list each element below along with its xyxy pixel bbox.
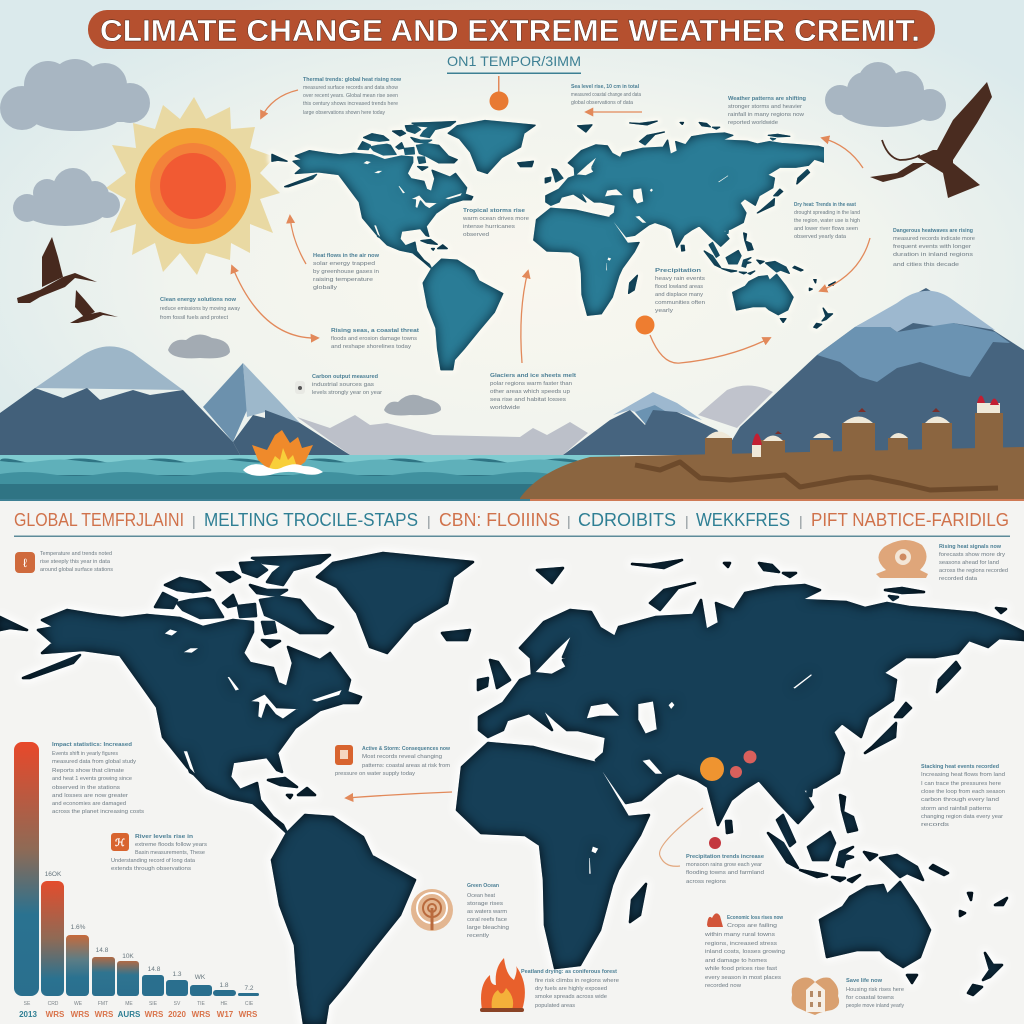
upper note: lower mid: Carbon output measured [312,374,378,380]
bar chart: WRS [145,1010,164,1019]
bar chart: SIE [149,1001,158,1007]
world map: upper [272,121,845,370]
icon: wildfire [480,958,525,1012]
upper note: lower mid: levels strongly year on year [312,390,382,396]
heading row: CDROIBITS [578,509,676,530]
bar chart: 2013 [19,1010,37,1019]
upper note: lower centre: Glaciers and ice sheets melt [490,373,576,379]
note: south indian: within many rural towns [704,932,775,938]
upper note: asia: and lower river flows seen [794,226,858,232]
bar chart: W17 [217,1010,234,1019]
note: bar chart main: and heat 1 events growing since [52,776,132,782]
icon: small fire badge [707,913,723,927]
note: chart secondary: extreme floods follow years [135,842,207,848]
note: south atlantic: Ocean heat [467,893,496,899]
note: top-left: around global surface stations [40,567,113,573]
heading row: | [799,513,803,529]
upper note: asia: Dry heat: Trends in the east [794,202,856,208]
bar chart [14,742,259,1019]
bar chart: CIE [245,1001,254,1007]
icon: radiating badge [411,889,453,931]
icon: large bird [870,82,992,198]
icon: small cloud [168,334,230,358]
upper note: far right: Dangerous heatwaves are rising [893,228,973,234]
heading row: GLOBAL TEMFRJLAINI [14,509,184,530]
note: south atlantic: storage rises [467,901,503,907]
icon: top-left badge [15,552,35,573]
bar chart: WRS [95,1010,114,1019]
upper note: far right: duration in inland regions [893,252,973,258]
upper note: right: Weather patterns are shifting [728,96,806,102]
bar chart: 2020 [168,1010,186,1019]
icon: bird left [17,237,97,303]
icon: village buildings [705,396,1003,460]
upper note: atlantic: Tropical storms rise [463,208,525,214]
arrow: lower left curve double headed [232,266,318,338]
icon: cloud left [13,168,120,226]
note: south indian: regions, increased stress [705,941,777,947]
bar chart: 1.8 [219,982,229,989]
upper note: temperature: this century shows increased trends here [303,101,398,107]
upper note: lower mid [295,374,382,396]
upper note: atlantic: intense hurricanes [463,224,515,230]
icon: small bird [70,290,118,323]
arrow: right curve [822,138,863,168]
note: atlantic: Active & Storm: Consequences now [362,746,451,752]
note: top-left: rise steeply this year in data [40,559,110,565]
upper note: pacific: globally [313,285,337,291]
note: wildfire: populated areas [535,1003,575,1009]
upper note: indian ocean: flood lowland areas [655,284,703,290]
upper note: right: stronger storms and heavier [728,104,802,110]
note: south atlantic: coral reefs face [467,917,507,923]
note: top-right: Rising heat signals now [939,544,1002,550]
arrow: indian ocean pointer [660,808,703,866]
bar chart: SE [24,1001,31,1007]
upper note: right: reported worldwide [728,120,778,126]
note: bar chart main: observed in the stations [52,785,120,791]
upper note: left: reduce emissions by moving away [160,306,240,312]
note: right pacific: Increasing heat flows from land [921,772,1005,778]
icon: small cloud lower [384,395,441,415]
note: bar chart main: and economies are damaged [52,801,126,807]
bar chart: 10K [122,953,134,960]
icon: atlantic note badge [335,745,353,765]
upper note: pacific: raising temperature [313,277,373,283]
bar chart: AURS [118,1010,141,1019]
upper note: temperature: Thermal trends: global heat rising now [303,77,402,83]
bar chart: WE [74,1001,83,1007]
note: wildfire: fire risk climbs in regions where [535,978,619,984]
note: south pacific: people move inland yearly [846,1003,904,1009]
bar chart: 7.2 [244,985,254,992]
heading row: WEKKFRES [696,509,790,530]
upper note: middle: Rising seas, a coastal threat [331,328,419,334]
heading row: | [685,513,689,529]
bar chart: WRS [192,1010,211,1019]
upper note: pacific: by greenhouse gases in [313,269,379,275]
arrow: atlantic [346,792,452,798]
arrow: to centre [586,111,642,113]
icon: cloud top right [825,62,946,127]
upper note: far right: measured records indicate more [893,236,975,242]
arrow: far right curve [820,238,870,291]
section divider [0,499,1024,501]
note: chart secondary: River levels rise in [135,834,193,840]
icon: chart note badge: ℋ [115,838,125,849]
icon: explosion on water [243,430,323,476]
note: chart secondary: Understanding record of long data [111,858,195,864]
heading row: | [192,513,196,529]
note: south pacific: for coastal towns [846,995,894,1001]
note: top-right: seasons ahead for land [939,560,999,566]
note: south atlantic: recently [467,933,489,939]
note: south atlantic: large bleaching [467,925,509,931]
note: bar chart main: measured data from global study [52,759,136,765]
upper note: indian ocean: communities often [655,300,705,306]
upper note: indian ocean: yearly [655,308,673,314]
upper note: far right: frequent events with longer [893,244,971,250]
note: indian ocean: Precipitation trends increase [686,854,764,860]
note: south pacific: Save life now [846,978,883,984]
world map: large [0,553,1024,1024]
upper note: atlantic: warm ocean drives more [462,216,529,222]
note: atlantic: pressure on water supply today [335,771,415,777]
heading rule [14,536,1010,537]
upper note: middle: and reshape shorelines today [331,344,411,350]
icon: cloud top left [0,59,150,131]
heading row: CBN: FLOIIINS [439,509,560,530]
note: right pacific: I can trace the pressures here [921,781,1001,787]
title banner: CLIMATE CHANGE AND EXTREME WEATHER CREMIT. [100,13,920,48]
bar chart: 14.8 [96,947,109,954]
bar chart: HE [221,1001,228,1007]
bar chart: WRS [71,1010,90,1019]
note: south atlantic: Green Ocean [467,883,499,889]
upper note: asia: observed yearly data [794,234,846,240]
note: right pacific: changing region data every year [921,814,1003,820]
note: south indian: and damage to homes [705,958,767,964]
landscape: sea [0,455,620,500]
note: indian ocean: monsoon rains grow each year [686,862,762,868]
note: top-left: Temperature and trends noted [40,551,112,557]
heading row: MELTING TROCILE-STAPS [204,509,418,530]
icon: chart note badge [111,833,129,851]
note: bar chart main: Impact statistics: Increased [52,742,132,748]
icon: sun [106,97,280,275]
note: south indian: Economic loss rises now [727,915,784,921]
arrow: top to sun [261,90,298,118]
note: top-right: forecasts show more dry [939,552,1005,558]
note: bar chart main: Events shift in yearly figures [52,751,118,757]
upper note: temperature: measured surface records and data show [303,85,398,91]
note: right pacific: close the loop from each season [921,789,1005,795]
upper note: lower centre: polar regions warm faster than [490,381,572,387]
upper note: middle: floods and erosion damage towns [331,336,417,342]
upper note: lower centre: other areas which speeds up [490,389,570,395]
note: bar chart main: across the planet increasing costs [52,809,144,815]
upper note: indian ocean: and displace many [655,292,703,298]
note: south indian: inland costs, losses growing [705,949,785,955]
arrow: up to sun [290,216,306,264]
note: south indian: Crops are failing [727,923,777,929]
note: right pacific: records [921,822,949,828]
note: chart secondary: Basin measurements, These [135,850,205,856]
upper note: centre top: Sea level rise, 10 cm in total [571,84,639,90]
note: bar chart main: Reports show that climate [52,768,124,774]
heading row: | [427,513,431,529]
land crack lines [635,462,998,490]
bar chart: SV [174,1001,181,1007]
note: atlantic: Most records reveal changing [362,754,442,760]
bar chart: WK [195,974,206,981]
map marker dots [700,750,756,849]
note: bar chart main: and losses are now greater [52,793,128,799]
upper note: asia: the region, water use is high [794,218,860,224]
landscape: right mountains [563,288,1024,460]
upper note: lower centre: sea rise and habitat losses [490,397,566,403]
icon: house [792,978,839,1015]
upper note: right: rainfall in many regions now [728,112,804,118]
upper note: centre top: measured coastal change and data [571,92,641,98]
bar chart: CRD [48,1001,59,1007]
upper note: left: from fossil fuels and protect [160,315,229,321]
note: right pacific: carbon through every land [921,797,999,803]
bar chart: 16OK [45,871,62,878]
subtitle with marker [447,53,581,110]
upper note: centre top: global observations of data [571,100,633,106]
icon: top-right badge [876,540,928,578]
upper note: left: Clean energy solutions now [160,297,237,303]
marker dot with arrow [636,316,770,363]
upper note: indian ocean: heavy rain events [655,276,705,282]
note: south pacific: Housing risk rises here [846,987,904,993]
landscape: far gray hills [297,415,588,455]
landscape: second peak [203,363,350,455]
upper note: lower centre: worldwide [489,405,520,411]
note: atlantic: patterns: coastal areas at risk from [362,763,451,769]
upper note: indian ocean: Precipitation [655,268,701,274]
icon: top-left badge: ℓ [23,556,27,570]
note: top-right: across the regions recorded [939,568,1008,574]
upper note: pacific: Heat flows in the air now [313,253,380,259]
bar chart: WRS [239,1010,258,1019]
upper note: temperature: over recent years. Global mean rise seen [303,93,398,99]
note: top-right: recorded data [939,576,977,582]
note: south indian: every season in most places [705,975,781,981]
arrow: africa up [521,271,528,363]
upper scene background [0,0,1024,500]
bar chart: 1.3 [172,971,182,978]
note: wildfire: smoke spreads across wide [535,994,607,1000]
note: south atlantic: as waters warm [467,909,508,915]
heading row: PIFT NABTICE-FARIDILG [811,509,1009,530]
heading row [14,509,1009,530]
bar chart: FMT [98,1001,108,1007]
note: chart secondary: extends through observations [111,866,191,872]
upper note: temperature: large observations shown here today [303,110,385,116]
note: right pacific: Stacking heat events recorded [921,764,999,770]
upper note: lower mid: industrial sources gas [312,382,374,388]
landscape: left mountain [0,346,240,455]
upper note: atlantic: observed [463,232,489,238]
bar chart: WRS [46,1010,65,1019]
bar chart: 1.6% [71,924,86,931]
bar chart: TIE [197,1001,206,1007]
note: right pacific: storm and rainfall patterns [921,806,991,812]
bar chart: ME [125,1001,133,1007]
note: indian ocean: flooding towns and farmland [686,870,764,876]
subtitle with marker: ON1 TEMPOR/3IMM [447,53,581,69]
note: south indian: while food prices rise fast [704,966,778,972]
bar chart: 14.8 [148,966,161,973]
upper note: far right: and cities this decade [893,262,959,268]
note: south indian: recorded now [705,983,741,989]
landscape: brown land [520,447,1024,500]
upper note: pacific: solar energy trapped [313,261,375,267]
note: wildfire: Peatland drying: as coniferous forest [521,969,617,975]
note: indian ocean: across regions [686,879,726,885]
note: wildfire: dry fuels are highly exposed [535,986,607,992]
heading row: | [567,513,571,529]
upper note: asia: drought spreading in the land [794,210,860,216]
